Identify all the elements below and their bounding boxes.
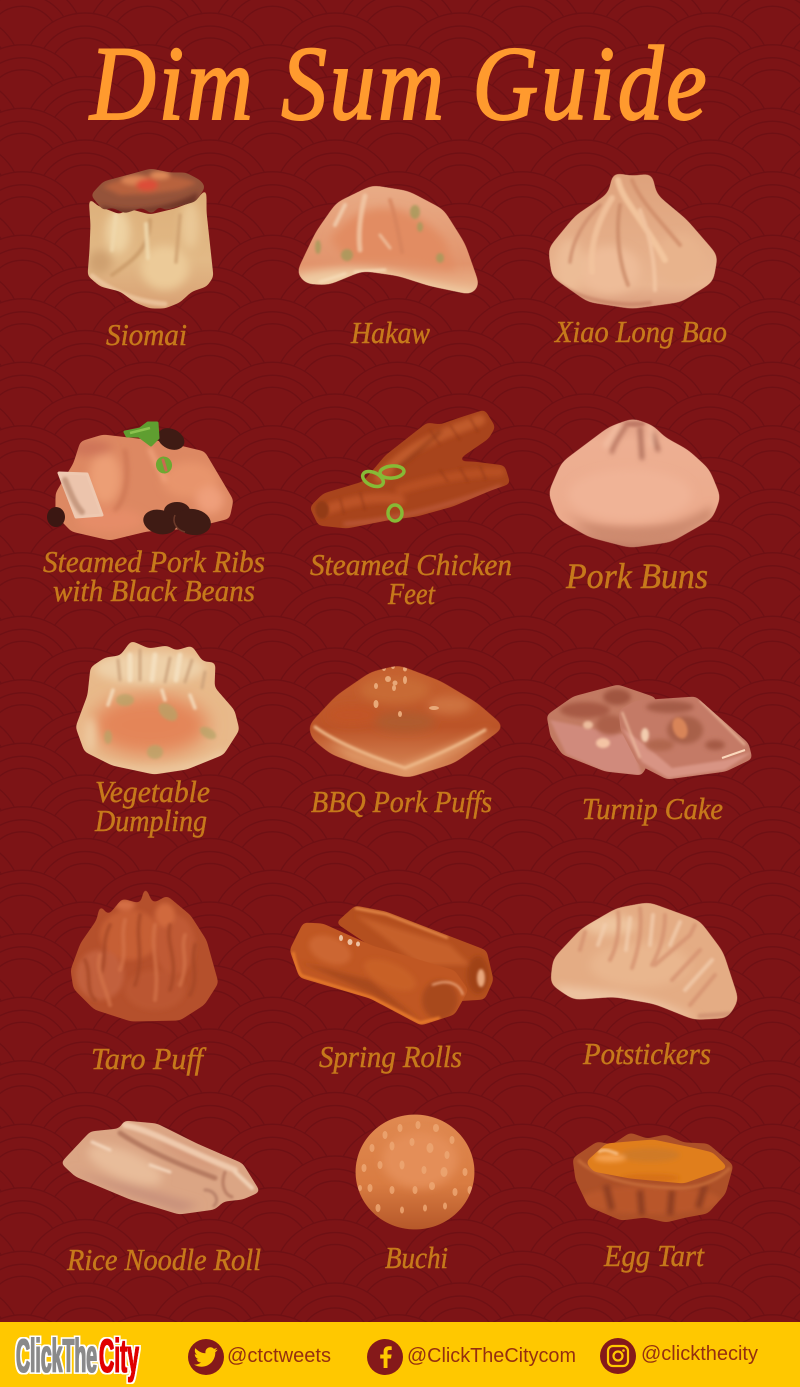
logo: ClickTheCity: [16, 1329, 139, 1382]
panel: BBQ Pork Puffs: [310, 666, 501, 819]
label: BBQ Pork Puffs: BBQ Pork Puffs: [311, 784, 492, 819]
panel: Vegetable Dumpling: Dumpling: [94, 803, 207, 838]
label: Pork Buns: Pork Buns: [565, 556, 708, 596]
panel: Steamed Pork Ribs: with Black Beans: [53, 573, 255, 608]
icon: turnip cake: [544, 682, 756, 782]
panel: Hakaw: [298, 186, 478, 344]
label: Spring Rolls: Spring Rolls: [319, 1039, 462, 1074]
panel: Vegetable Dumpling: [72, 638, 242, 838]
text: instagram handle: @clickthecity: [641, 1343, 758, 1365]
label: Rice Noodle Roll: Rice Noodle Roll: [66, 1242, 261, 1277]
panel: Turnip Cake: [544, 682, 756, 826]
label: Buchi: Buchi: [385, 1240, 448, 1275]
panel: Steamed Pork Ribs: [43, 423, 265, 608]
panel: Taro Puff: [66, 882, 222, 1076]
icon: BBQ pork puff: [310, 666, 501, 777]
panel: Siomai: [84, 166, 216, 352]
label: Xiao Long Bao: Xiao Long Bao: [553, 314, 727, 349]
label: Turnip Cake: Turnip Cake: [582, 791, 723, 826]
label: Steamed Chicken Feet: Steamed Chicken: [310, 547, 512, 582]
title: Dim Sum Guide: [88, 26, 707, 143]
panel: Pork Buns: [550, 419, 720, 588]
panel: Steamed Chicken Feet: [306, 406, 514, 611]
icon: chicken feet: [306, 406, 514, 530]
icon: egg tart: [573, 1134, 732, 1222]
icon: taro puff: [71, 890, 218, 1022]
icon: buchi: [356, 1114, 474, 1230]
panel: Buchi: [356, 1114, 474, 1268]
text: twitter handle: @ctctweets: [227, 1345, 331, 1367]
label: Taro Puff: Taro Puff: [91, 1041, 207, 1076]
icon: hakaw: [298, 186, 478, 294]
icon: pork ribs: [47, 423, 236, 543]
icon: spring rolls: [286, 903, 496, 1028]
icon: potstickers: [550, 902, 738, 1020]
label: Egg Tart: Egg Tart: [603, 1238, 705, 1273]
icon: rice noodle roll: [62, 1120, 258, 1214]
footer bar: City: [99, 1329, 139, 1382]
panel: Steamed Chicken Feet: Feet: [387, 576, 436, 611]
label: Steamed Pork Ribs with Black Beans: Steamed Pork Ribs: [43, 544, 265, 579]
label: Siomai: Siomai: [106, 317, 187, 352]
icon: siomai: [84, 166, 216, 311]
panel: Egg Tart: [569, 1130, 737, 1273]
icon: pork bun: [550, 419, 720, 548]
logo: ClickTheCity: ClickThe: [16, 1329, 97, 1382]
panel: Xiao Long Bao: [540, 165, 727, 349]
label: Hakaw: Hakaw: [350, 315, 430, 350]
label: Vegetable Dumpling: Vegetable: [95, 774, 210, 809]
icon: twitter: [188, 1339, 224, 1375]
icon: xiao long bao: [548, 174, 717, 309]
panel: Potstickers: [550, 902, 738, 1064]
icon: instagram: [600, 1338, 636, 1374]
spring onion: [125, 423, 158, 445]
panel: Rice Noodle Roll: [58, 1118, 264, 1277]
icon: facebook: [367, 1339, 403, 1375]
black beans: [140, 424, 213, 538]
icon: vegetable dumpling: [72, 638, 242, 778]
footer bar: [0, 1322, 800, 1387]
panel: Spring Rolls: [286, 903, 496, 1074]
label: Potstickers: Potstickers: [582, 1036, 711, 1071]
text: facebook handle: @ClickTheCitycom: [407, 1345, 576, 1367]
